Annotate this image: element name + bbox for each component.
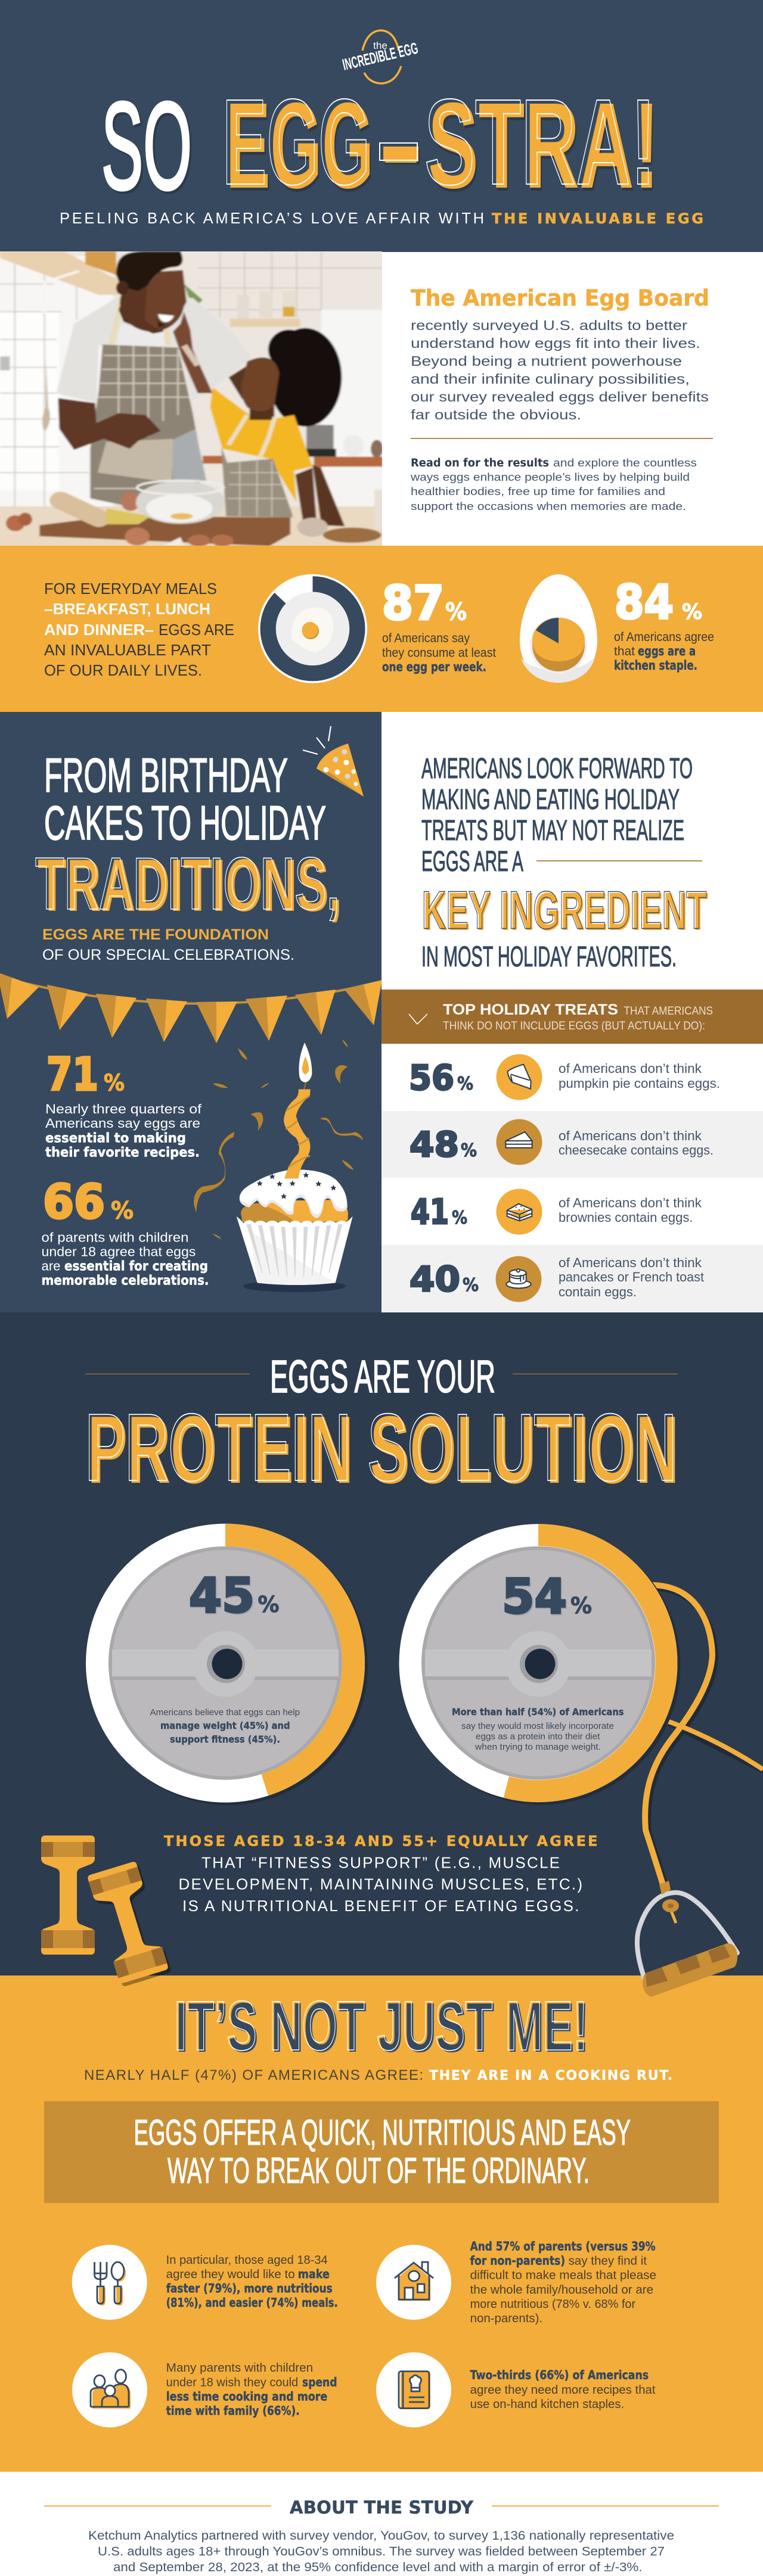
text: fitness support: IS A NUTRITIONAL BENEFIT OF EATING EGGS. [182,1897,579,1915]
title: SO [103,79,194,218]
icon: band handle [637,1881,737,1997]
logo: the incredible egg: the [373,40,387,51]
title: EGG [226,77,374,214]
item: family time: spend [302,2375,337,2389]
text: foundation: OF OUR SPECIAL CELEBRATIONS. [42,947,294,963]
title [101,74,660,218]
heading: traditions: TRADITIONS, [38,845,342,927]
subheading: cooking rut [84,2067,672,2083]
stat: 66%: essential for creating [64,1259,208,1274]
intro paragraph: far outside the obvious. [411,407,581,422]
icon: resistance band [645,1585,763,1887]
panel: about the study [0,2472,763,2576]
row: pumpkin pie [409,1054,720,1100]
row: pumpkin pie: % [457,1074,473,1094]
stat: 84% [614,576,714,673]
stat: 66%: are [42,1258,61,1274]
item: recipes [376,2353,656,2428]
title: SO [101,77,192,216]
chart: 45% weight plate: 45 [190,1569,256,1625]
stat: 87%: they consume at least [382,646,496,660]
chart: 54% weight plate: More than half (54%) of Americans [452,1706,624,1718]
row: brownies: brownies contain eggs. [559,1210,693,1225]
study description: Ketchum Analytics partnered with survey vendor, YouGov, to survey 1,136 nationally representative [88,2529,674,2543]
chart: 45% weight plate: manage weight (45%) and [160,1720,290,1731]
text: fitness support [164,1833,598,1915]
heading: eggs are your: EGGS ARE YOUR [270,1351,495,1402]
chart: 45% weight plate [86,1524,368,1805]
study description: U.S. adults ages 18+ through YouGov’s omnibus. The survey was fielded between September 27 [98,2545,665,2558]
heading: from birthday cakes: CAKES TO HOLIDAY [44,797,326,850]
chart: 87% plate donut [258,574,367,683]
text: everyday meals: FOR EVERYDAY MEALS [44,580,217,598]
stat: 84%: 84 [615,576,674,630]
chart: 45% weight plate: support fitness (45%). [170,1734,280,1745]
icon: house [395,2262,433,2301]
tagline: THE INVALUABLE EGG [492,210,703,227]
icon: fork and spoon [94,2262,126,2306]
row: cheesecake: of Americans don’t think [559,1128,702,1143]
item: parents: say they find it [569,2254,647,2267]
text: fitness support: THOSE AGED 18-34 AND 55+ EQUALLY AGREE [164,1833,598,1849]
text: everyday meals: EGGS ARE [159,621,234,639]
intro paragraph: Beyond being a nutrient powerhouse [411,353,682,369]
row: pancakes: 40 [410,1259,460,1299]
item: recipes: Two-thirds (66%) of Americans [470,2367,649,2382]
row: brownies: of Americans don’t think [559,1195,702,1211]
panel: header [0,0,763,252]
stat: 66%: % [111,1197,134,1225]
stat: 84%: that [614,645,635,658]
text: fitness support: DEVELOPMENT, MAINTAINING MUSCLES, ETC.) [179,1875,582,1893]
text: fitness support: THAT “FITNESS SUPPORT” (E.G., MUSCLE [201,1854,560,1872]
photo: father and child baking [0,246,390,552]
item: faster meals: (81%), and easier (74%) meals. [166,2295,338,2310]
icon: party hat [303,726,364,797]
illustration: cupcake with candle and confetti [194,1040,363,1292]
stat: 66%: under 18 agree that eggs [42,1244,196,1259]
stat: 87%: % [445,598,467,626]
stat: 84%: eggs are a [638,644,696,658]
stat: 84%: of Americans agree [614,630,714,644]
banner: top holiday treats [382,990,763,1044]
row: pancakes: pancakes or French toast [559,1270,704,1284]
banner: top holiday treats: TOP HOLIDAY TREATS [443,1001,618,1018]
heading: traditions [35,843,342,927]
banner: top holiday treats: THINK DO NOT INCLUDE EGGS (BUT ACTUALLY DO): [443,1020,705,1032]
intro paragraph: and their infinite culinary possibilities, [411,371,690,387]
stat: 71%: Americans say eggs are [45,1116,200,1131]
banner: top holiday treats: THAT AMERICANS [624,1005,713,1018]
item: parents: difficult to make meals that please [470,2269,656,2282]
text: foundation [42,926,294,963]
item: parents: the whole family/household or are [470,2283,653,2297]
panel: celebrations [0,712,763,1312]
intro paragraph: recently surveyed U.S. adults to better [411,318,687,333]
icon: recipe book [399,2371,430,2409]
tagline: PEELING BACK AMERICA’S LOVE AFFAIR WITH [60,210,484,227]
row: pumpkin pie: 56 [409,1057,454,1098]
read on paragraph: support the occasions when memories are made. [411,500,686,512]
item: parents: non-parents). [470,2312,542,2325]
stat: 71%: % [104,1070,125,1096]
row: pancakes [382,1245,763,1312]
chart: 45% weight plate: % [258,1592,279,1617]
heading: about the study: ABOUT THE STUDY [290,2497,474,2518]
read on paragraph [410,456,697,512]
stat: 87%: 87 [382,577,444,630]
panel: it's not just me [0,1975,763,2472]
icon: boiled egg 84% chart [520,574,597,683]
item: faster meals [72,2245,338,2320]
chart: 54% weight plate: 54 [502,1569,567,1624]
item: family time [72,2353,337,2428]
icon: family [91,2370,131,2409]
text: everyday meals: AND DINNER– [44,621,154,639]
stat: 84%: % [682,600,702,624]
item: faster meals: agree they would like to [166,2268,295,2281]
logo: the incredible egg [341,30,420,83]
panel: everyday meals [0,546,763,712]
stat: 66%: of parents with children [42,1230,188,1245]
item: family time: Many parents with children [166,2362,313,2375]
chart: 54% weight plate: 54 [503,1570,568,1625]
chart: 54% weight plate: eggs as a protein into their diet [476,1731,600,1742]
row: pancakes: contain eggs. [559,1284,637,1299]
intro paragraph: understand how eggs fit into their lives. [411,335,700,351]
item: parents: And 57% of parents (versus 39% [470,2239,656,2253]
stat: 71% [45,1047,202,1161]
chart: 54% weight plate: when trying to manage weight. [474,1742,601,1752]
decoration: bunting [0,972,382,1043]
chart: 54% weight plate [399,1524,681,1805]
row: cheesecake [382,1111,763,1178]
stat: 71%: Nearly three quarters of [45,1102,202,1116]
heading: The American Egg Board: The American Egg Board [411,285,709,311]
logo: the incredible egg: INCREDIBLE EGG [341,39,420,74]
intro paragraph [411,318,709,422]
read on paragraph: healthier bodies, free up time for families and [411,485,665,497]
item: faster meals: faster (79%), more nutritious [166,2281,333,2295]
chart: 54% weight plate: say they would most likely incorporate [461,1721,614,1731]
subheading: cooking rut: NEARLY HALF (47%) OF AMERICANS AGREE: [84,2067,423,2083]
title: – [383,79,418,216]
stat: 71%: 71 [46,1047,98,1101]
text: americans look forward [421,753,693,878]
stat: 87% [382,577,496,674]
chart: 54% weight plate: % [570,1593,592,1619]
row: cheesecake: cheesecake contains eggs. [559,1143,714,1158]
text: everyday meals: OF OUR DAILY LIVES. [44,661,202,679]
read on paragraph: and explore the countless [553,456,697,469]
item: family time: time with family (66%). [166,2403,300,2418]
item: faster meals: make [298,2267,330,2281]
text: everyday meals [44,580,234,679]
title: EGG [227,80,375,217]
heading: from birthday cakes [44,749,326,850]
row: brownies: 41 [411,1191,449,1232]
row: pumpkin pie: pumpkin pie contains eggs. [559,1076,720,1091]
row: pancakes: % [463,1275,479,1296]
tagline [60,210,703,227]
item: family time: less time cooking and more [166,2389,327,2403]
panel: intro [0,251,713,546]
row: cheesecake: 48 [410,1124,459,1165]
stat: 71%: their favorite recipes. [45,1145,200,1161]
item: parents [376,2239,656,2325]
text: everyday meals: –BREAKFAST, LUNCH [44,600,210,618]
row: pancakes: of Americans don’t think [559,1255,702,1270]
subheading: cooking rut: THEY ARE IN A COOKING RUT. [429,2068,672,2083]
study description [88,2529,674,2574]
icon: dumbbells [41,1835,172,1987]
heading: traditions: TRADITIONS, [35,843,340,925]
item: parents: more nutritious (78% v. 68% for [470,2298,635,2311]
stat: 87%: one egg per week. [382,660,486,674]
item: recipes: agree they need more recipes that [470,2384,656,2397]
stat: 66%: memorable celebrations. [42,1274,209,1288]
heading: from birthday cakes: FROM BIRTHDAY [44,749,288,802]
row: brownies [411,1189,702,1234]
row: pumpkin pie: of Americans don’t think [559,1061,702,1076]
row: brownies: % [452,1208,467,1228]
callout box [44,2101,719,2203]
stat: 66% [42,1176,209,1288]
read on paragraph: ways eggs enhance people’s lives by helping build [410,471,690,483]
item: family time: under 18 wish they could [166,2376,298,2389]
panel: protein solution [0,1312,763,1997]
item: parents: for non-parents) [470,2253,565,2267]
stat: 66%: 66 [43,1176,105,1230]
heading: it's not just me [174,1987,590,2067]
chart: 45% weight plate: Americans believe that eggs can help [150,1707,300,1718]
stat: 87%: of Americans say [382,631,470,645]
text: foundation: EGGS ARE THE FOUNDATION [42,926,269,943]
text: everyday meals: AN INVALUABLE PART [44,641,211,659]
study description: and September 28, 2023, at the 95% confidence level and with a margin of error of ±/-3%. [113,2561,643,2574]
intro paragraph: our survey revealed eggs deliver benefits [411,389,709,405]
read on paragraph: Read on for the results [411,457,549,469]
title: EGG [222,74,370,210]
text: americans look forward: EGGS ARE A [421,846,523,878]
stat: 84%: kitchen staple. [614,658,697,673]
item: recipes: use on-hand kitchen staples. [470,2398,624,2411]
row: cheesecake: % [461,1140,477,1161]
item: faster meals: In particular, those aged 18-34 [166,2254,328,2267]
chart: 45% weight plate: 45 [189,1568,255,1623]
stat: 71%: essential to making [45,1131,186,1146]
